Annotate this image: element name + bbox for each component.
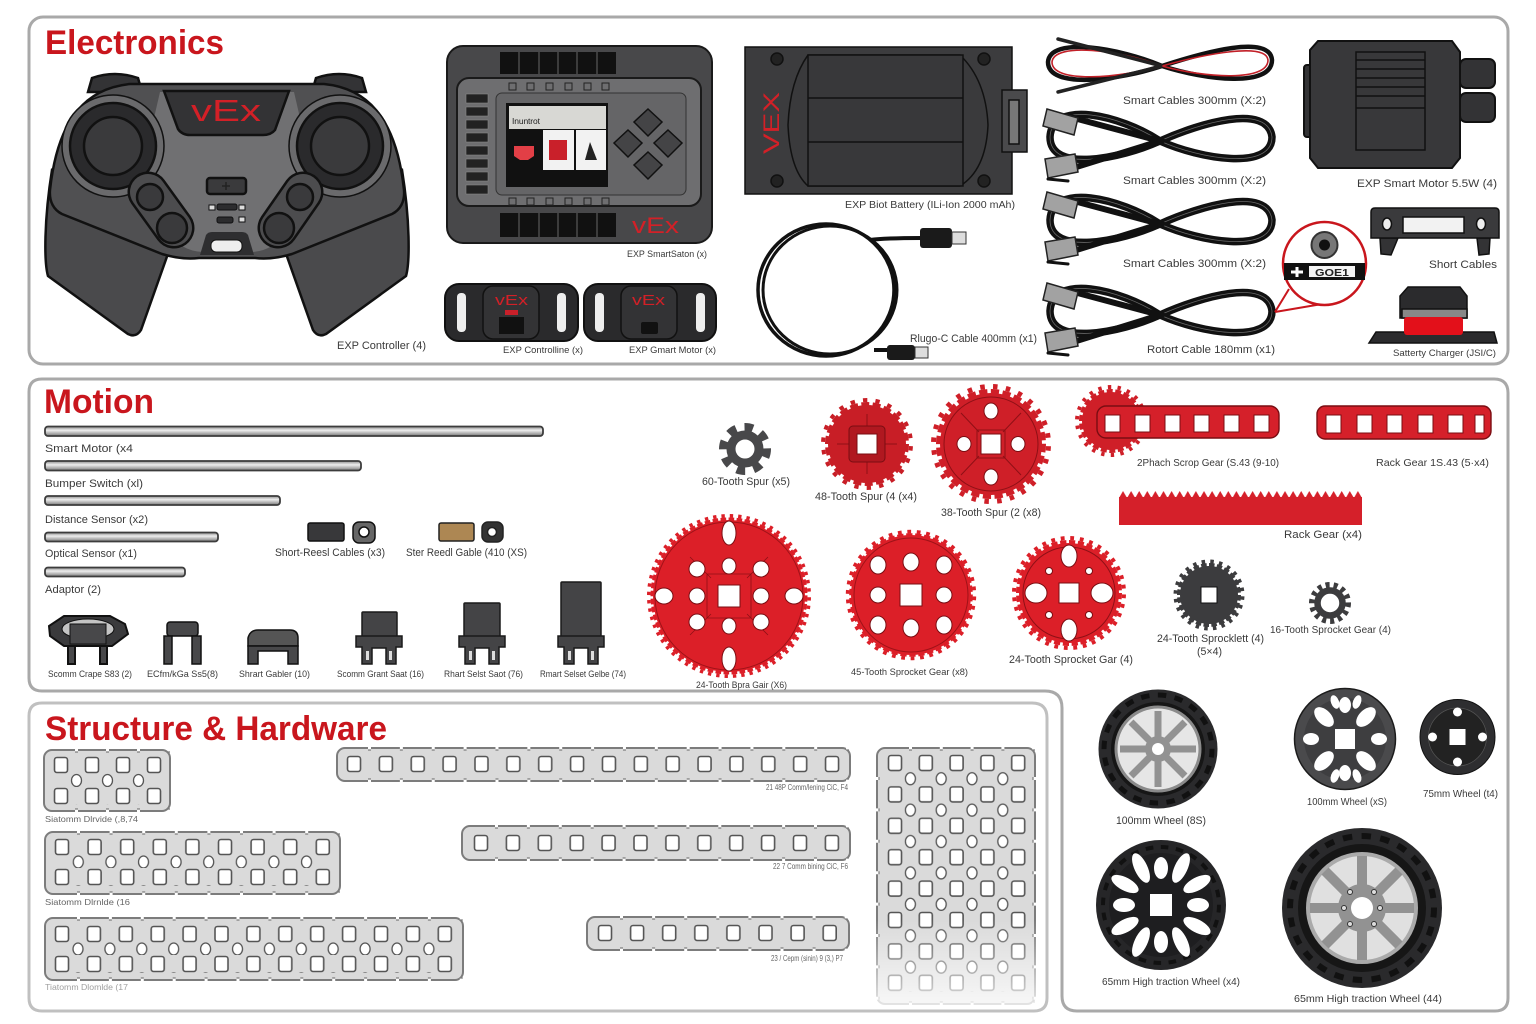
label: plate a: Siatomm Dlrvide (,8,74 [45,814,138,824]
label: shaft 3: Distance Sensor (x2) [45,514,148,526]
inner band [457,78,701,206]
label: 16-tooth: 16-Tooth Sprocket Gear (4) [1270,625,1391,636]
brain illustration [447,46,712,243]
label: 24-tooth dark: 24-Tooth Sprocklett (4) [1157,633,1264,645]
label: smart cable 3: Smart Cables 300mm (X:2) [1123,258,1266,270]
label: plate c: Tiatomm Dlomlde (17 [45,982,128,992]
body [447,46,712,243]
top icons [509,83,609,90]
bracket 1 [356,612,402,664]
plate f [587,917,849,950]
label: plate f: 23 / Cepm (sinin) 9 (3,) P7 [771,953,843,963]
label: plate e: 22 7 Comm bining CiC, F6 [773,861,848,871]
gear: 16-tooth sprocket [1312,585,1348,621]
label: short reel: Short-Reesl Cables (x3) [275,547,385,559]
rack gear [1119,491,1362,525]
heading: structure and hardware: Structure & Hardware [45,710,387,748]
gear: 24-tooth sprocket red [1014,538,1124,648]
label: shaft 2: Bumper Switch (xl) [45,478,143,490]
wheel: 100mm spoked [1294,688,1396,790]
bracket 3 [558,582,604,664]
label: clip 2: ECfm/kGa Ss5(8) [147,669,218,680]
label: short cables: Short Cables [1429,259,1498,271]
label: smart cable 1: Smart Cables 300mm (X:2) [1123,95,1266,107]
label: usb-c cable: Rlugo-C Cable 400mm (x1) [910,333,1037,345]
battery logo: VEX [759,92,784,154]
left pod [137,184,187,243]
wheel: 75mm [1420,700,1495,774]
motion: shaft bars [45,426,543,576]
label: wheel 1: 100mm Wheel (8S) [1116,815,1206,827]
pill recess [200,232,254,255]
panel: structure and hardware [29,703,1047,1011]
right pod [264,184,313,243]
left grip [45,170,170,335]
screen [506,103,608,187]
strap right logo: vEx [632,292,666,309]
left shoulder [62,95,164,197]
smart cable 2 [1043,109,1272,181]
bottom ports [500,213,616,237]
vex badge [164,91,289,135]
centre button [207,178,246,194]
label: 24-tooth dark qty: (5×4) [1197,646,1222,658]
label: rotor cable: Rotort Cable 180mm (x1) [1147,344,1275,356]
gear: 60-tooth spur [723,427,767,471]
clip 2 [164,622,201,664]
heading: electronics: Electronics [45,24,224,62]
screen bezel [496,93,686,195]
label: controller: EXP Controller (4) [337,340,426,352]
label: battery charger: Satterty Charger (JSI/C) [1393,348,1496,359]
label: smart cable 2: Smart Cables 300mm (X:2) [1123,175,1266,187]
label: 60-tooth: 60-Tooth Spur (x5) [702,476,790,488]
centre face [142,92,312,252]
strap module right [584,284,716,341]
smart cable 3 [1043,192,1272,264]
plate e [462,826,850,860]
usb-c cable [758,224,966,360]
label: shaft 4: Optical Sensor (x1) [45,548,137,560]
screen header [509,106,606,129]
strap left logo: vEx [495,292,529,309]
plate a [44,750,170,811]
label: bracket 3: Rmart Selset Gelbe (74) [540,669,626,680]
label: wheel 4: 65mm High traction Wheel (x4) [1102,976,1240,988]
side ports [466,94,488,194]
label: chain gear: 2Phach Scrop Gear (S.43 (9-10) [1137,458,1279,469]
label: 48-tooth: 48-Tooth Spur (4 (x4) [815,491,917,503]
label: battery: EXP Biot Battery (ILi-Ion 2000 mAh) [845,200,1015,211]
label: wheel 5: 65mm High traction Wheel (44) [1294,993,1442,1005]
label: brain: EXP SmartSaton (x) [627,249,707,260]
left stick [70,103,156,189]
chain gear bar [1077,387,1279,455]
label: wheel 2: 100mm Wheel (xS) [1307,797,1387,808]
label: 38-tooth: 38-Tooth Spur (2 (x8) [941,507,1041,519]
smart cable 1 [1048,39,1272,92]
rack link bar [1317,406,1491,439]
label: bracket 1: Scomm Grant Saat (16) [337,669,424,680]
clip 1 [49,616,128,664]
label: wheel 3: 75mm Wheel (t4) [1423,788,1498,800]
screen tiles [514,130,606,170]
label: 24-tooth red: 24-Tooth Sprocket Gar (4) [1009,654,1133,666]
gear: 45-tooth sprocket [848,532,974,658]
label: plate d: 21 48P Comm/lening CiC, F4 [766,782,848,792]
clip 3 [248,630,298,664]
label: smart motor: EXP Smart Motor 5.5W (4) [1357,178,1497,190]
gear: 24-tooth sprocket dark [1176,562,1242,628]
label: bracket 2: Rhart Selst Saot (76) [444,669,523,680]
controller illustration [45,74,409,335]
wheel: 65mm high traction [1282,828,1442,988]
panel: motion and wheels outline [29,379,1508,1011]
bumpers [88,74,366,92]
wheel: 65mm spoked [1096,840,1226,970]
label: shaft 5: Adaptor (2) [45,584,101,596]
plate c [45,918,463,980]
controller logo: vEx [191,93,262,128]
heading: motion: Motion [44,383,154,421]
label: rack gear: Rack Gear (x4) [1284,529,1362,541]
d-pad [614,109,682,179]
ster reel parts [439,522,503,542]
small buttons [209,204,245,223]
short cables bracket [1371,208,1499,255]
panel: electronics [29,17,1508,364]
home pill [211,240,242,252]
label: ster reel: Ster Reedl Gable (410 (XS) [406,547,527,559]
gear: large open gear [649,516,809,676]
zoom callout [1275,222,1366,312]
wheel: 100mm tyre [1098,690,1218,808]
right stick [297,103,383,189]
label: shaft 1: Smart Motor (x4 [45,443,133,455]
label: strap left: EXP Controlline (x) [503,345,583,356]
brain logo: vEx [632,213,679,238]
label: rack link: Rack Gear 1S.43 (5·x4) [1376,457,1489,469]
label: large gear: 24-Tooth Bpra Gair (X6) [696,680,787,691]
strap module left [445,284,578,341]
battery [745,47,1027,194]
plate b [45,832,340,894]
plate d [337,748,850,781]
bottom icons [509,198,609,205]
screen text: Inuntrot [512,116,541,126]
short reel parts [308,522,375,543]
callout text: GOE1 [1315,268,1350,279]
label: clip 1: Scomm Crape S83 (2) [48,669,132,680]
right grip [284,170,409,335]
smart motor [1304,41,1495,168]
label: 45-tooth: 45-Tooth Sprocket Gear (x8) [851,667,968,678]
label: clip 3: Shrart Gabler (10) [239,669,310,680]
plate g [875,748,1037,1006]
gear: 48-tooth spur [823,400,911,488]
bracket 2 [459,603,505,664]
gear: 38-tooth spur [934,386,1048,502]
right shoulder [289,95,391,197]
top ports [500,52,616,74]
rotor cable [1043,283,1272,355]
label: strap right: EXP Gmart Motor (x) [629,345,716,356]
battery charger [1369,287,1497,343]
label: plate b: Siatomm Dlrnlde (16 [45,897,130,907]
body [50,84,404,258]
